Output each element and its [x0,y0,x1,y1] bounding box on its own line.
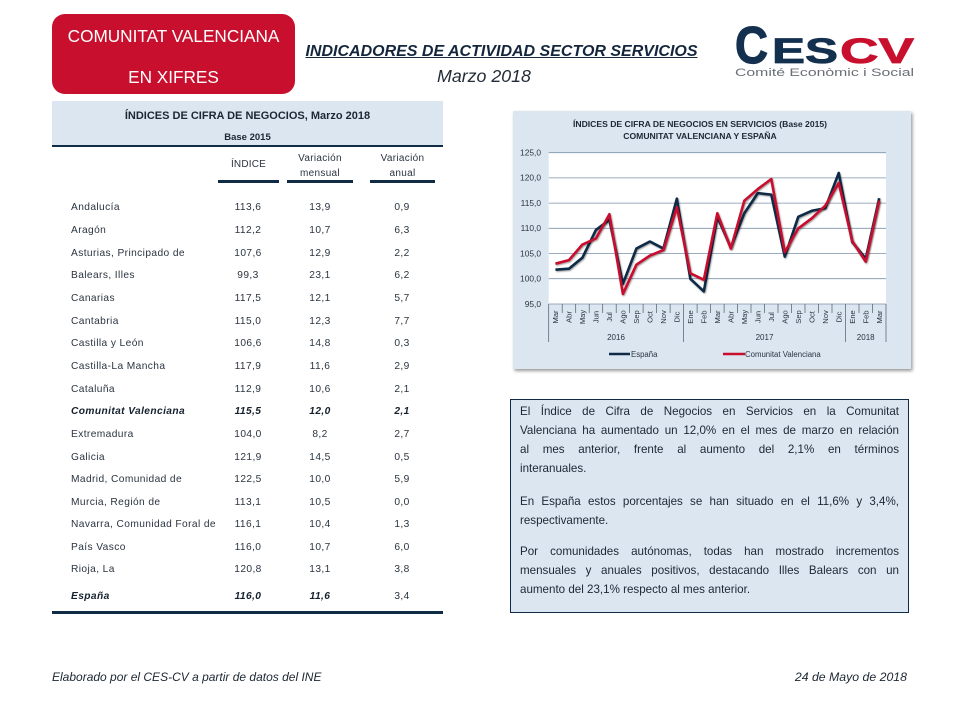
title: INDICADORES DE ACTIVIDAD SECTOR SERVICIOS [305,43,698,60]
row: Espana: 116,0 [235,591,261,602]
row: Asturias: Asturias, Principado de [71,248,185,259]
header badge: COMUNITAT VALENCIANA [68,26,279,46]
row: Cantabria: 115,0 [235,316,261,327]
row: Cantabria: Cantabria [71,316,119,327]
row: Extremadura: 8,2 [312,429,328,440]
x axis month labels: Feb [862,310,870,324]
column header: indice: ÍNDICE [231,159,266,170]
row: Asturias: 107,6 [234,248,262,259]
row: Espana: España [71,591,110,602]
x axis month labels: Sep [794,310,803,324]
row: Castilla-La Mancha: 11,6 [310,361,330,372]
row: Galicia [71,452,410,463]
row: Comunitat Valenciana: 2,1 [394,406,410,417]
x axis month labels: Nov [659,310,668,324]
logo: CES-CV [735,20,915,79]
row: Murcia [71,497,410,508]
row: Andalucia: 13,9 [309,202,331,213]
row: Cataluna: 10,6 [309,384,331,395]
x axis month labels: Ene [686,310,695,324]
column header: variacion anual: anual [390,168,415,179]
legend: España [631,350,658,359]
paragraph 1: al mes anterior, frente al aumento del 2,1% en términos [520,442,899,456]
row: Extremadura: 104,0 [234,429,262,440]
row: Rioja: 13,1 [309,564,331,575]
row: Castilla y Leon: 0,3 [394,338,410,349]
x axis month labels: Dic [834,311,844,322]
line chart panel [512,111,914,373]
chart title [573,119,827,141]
row: Aragon: Aragón [71,225,106,236]
x axis month labels: Ago [780,310,790,324]
row: Espana [71,591,410,602]
row: Galicia: Galicia [71,452,105,463]
footer date: 24 de Mayo de 2018 [795,670,907,684]
row: Comunitat Valenciana: Comunitat Valenciana [71,406,185,417]
column header: variacion mensual: Variación [298,153,342,164]
row: Andalucia [71,202,410,213]
row: Pais Vasco: 10,7 [309,542,331,553]
row: Canarias: 117,5 [235,293,261,304]
y axis labels: 105,0 [520,248,541,258]
row: Galicia: 0,5 [394,452,410,463]
table subtitle: Base 2015 [224,132,271,143]
row: Asturias: 12,9 [309,248,331,259]
row: Madrid: Madrid, Comunidad de [71,474,182,485]
row: Baleares: 6,2 [394,270,410,281]
row: Castilla y Leon: 14,8 [309,338,331,349]
row: Cataluna: 2,1 [394,384,410,395]
y axis labels: 120,0 [520,173,541,183]
x axis month labels: Nov [821,310,830,324]
row: Murcia: Murcia, Región de [71,497,160,508]
x axis year labels: 2018 [857,333,875,342]
x axis month labels: Feb [700,310,709,324]
table title: ÍNDICES DE CIFRA DE NEGOCIOS, Marzo 2018 [125,110,370,122]
row: Murcia: 113,1 [235,497,261,508]
row: Pais Vasco: 6,0 [394,542,410,553]
x axis month labels: Abr [727,311,736,323]
row: Castilla y Leon: Castilla y León [71,338,144,349]
row: Galicia: 121,9 [234,452,262,463]
logo: CES-CV: Comité Econòmic i Social [735,67,914,79]
series: Comunitat Valenciana [555,179,879,294]
row: Murcia: 10,5 [309,497,331,508]
header badge: EN XIFRES [128,67,219,87]
column header: indice [218,148,279,183]
row: Rioja: 3,8 [394,564,410,575]
subtitle: Marzo 2018 [437,66,531,86]
row: Cataluna: 112,9 [235,384,261,395]
row: Castilla y Leon: 106,6 [234,338,262,349]
row: Castilla-La Mancha [71,361,410,372]
paragraph 1 [520,404,899,474]
row: Extremadura: 2,7 [394,429,410,440]
row: Aragon: 10,7 [309,225,331,236]
row: Asturias: 2,2 [394,248,410,259]
x axis month labels: Ene [848,310,857,324]
paragraph 1: Valenciana ha aumentado un 12,0% en el mes de marzo en relación [520,424,899,436]
x axis month labels: Jun [592,311,601,323]
series: Espana [555,173,879,291]
row: Navarra [71,519,410,530]
paragraph 3: Por comunidades autónomas, todas han mostrado incrementos [520,545,899,558]
x axis month labels: Oct [646,310,655,323]
y axis labels: 115,0 [521,198,541,208]
row: Cantabria: 12,3 [309,316,331,327]
paragraph 1: interanuales. [520,462,586,474]
row: Aragon: 6,3 [394,225,410,236]
y axis labels: 100,0 [520,274,541,284]
y axis labels [520,148,541,309]
row: Canarias [71,293,410,304]
x axis month labels: Jul [767,312,776,322]
x axis year labels: 2017 [756,333,774,342]
row: Pais Vasco: 116,0 [235,542,261,553]
x axis month labels: Ago [619,310,628,324]
row: Extremadura: Extremadura [71,429,134,440]
x axis month labels: Sep [632,310,641,324]
x axis month labels: Jul [605,312,614,322]
logo: CES-CV: CV [840,32,915,71]
x axis month labels: Jun [754,311,762,323]
legend [609,350,821,359]
paragraph 2 [520,495,899,527]
row: Rioja [71,564,410,575]
row: Extremadura [71,429,410,440]
row: Comunitat Valenciana [71,406,410,417]
x axis month labels: Mar [551,310,560,324]
x axis month labels: Mar [713,310,722,324]
row: Castilla-La Mancha: 117,9 [235,361,261,372]
row: Canarias: 12,1 [309,293,331,304]
row: Baleares: 23,1 [309,270,331,281]
paragraph 2: respectivamente. [520,514,608,527]
table [52,101,443,614]
row: Baleares: 99,3 [237,270,259,281]
paragraph 3 [520,545,899,596]
row: Cataluna: Cataluña [71,384,115,395]
x axis month labels: Dic [673,311,682,322]
column header: variacion anual [370,148,435,183]
x axis month labels [551,310,884,324]
row: Navarra: Navarra, Comunidad Foral de [71,519,216,530]
row: Castilla y Leon [71,338,410,349]
row: Madrid [71,474,410,485]
row: Comunitat Valenciana: 12,0 [309,406,331,417]
paragraph 2: En España estos porcentajes se han situado en el 11,6% y 3,4%, [520,495,899,508]
row: Andalucia: 113,6 [235,202,261,213]
table bottom rule [52,611,443,614]
x axis month labels: May [740,310,749,324]
y axis labels: 125,0 [520,148,541,158]
row: Rioja: 120,8 [234,564,262,575]
x axis month labels: Abr [565,311,574,323]
row: Pais Vasco: País Vasco [71,542,126,553]
header badge [52,14,295,94]
row: Murcia: 0,0 [394,497,410,508]
row: Madrid: 5,9 [394,474,410,485]
row: Espana: 3,4 [394,591,410,602]
row: Rioja: Rioja, La [71,564,115,575]
row: Aragon [71,225,410,236]
chart title: ÍNDICES DE CIFRA DE NEGOCIOS EN SERVICIOS (Base 2015) [573,119,827,129]
row: Cantabria [71,316,410,327]
y axis labels: 95,0 [525,299,541,309]
column header: variacion mensual [287,148,353,183]
row: Baleares: Balears, Illes [71,270,135,281]
legend: Comunitat Valenciana [745,350,821,359]
x axis year labels [607,333,875,342]
row: Navarra: 116,1 [235,519,261,530]
row: Castilla-La Mancha: Castilla-La Mancha [71,361,165,372]
row: Espana: 11,6 [310,591,330,602]
row: Canarias: 5,7 [394,293,410,304]
paragraph 3: aumento del 23,1% respecto al mes anterior. [520,583,750,596]
row: Comunitat Valenciana: 115,5 [235,406,261,417]
row: Cantabria: 7,7 [394,316,410,327]
x axis month labels: Mar [875,310,884,324]
row: Navarra: 1,3 [394,519,410,530]
column header: variacion anual: Variación [381,153,424,164]
y axis labels: 110,0 [521,223,541,233]
footer source: Elaborado por el CES-CV a partir de datos del INE [52,670,321,684]
row: Asturias [71,248,410,259]
row: Pais Vasco [71,542,410,553]
logo: CES-CV: ES [772,32,838,71]
table header band [52,101,443,147]
row: Aragon: 112,2 [235,225,261,236]
row: Andalucia: Andalucía [71,202,120,213]
chart title: COMUNITAT VALENCIANA Y ESPAÑA [623,131,777,141]
x axis month labels: Oct [808,310,816,323]
row: Navarra: 10,4 [309,519,331,530]
row: Castilla-La Mancha: 2,9 [394,361,410,372]
row: Galicia: 14,5 [309,452,331,463]
column header: variacion mensual: mensual [300,168,340,179]
row: Andalucia: 0,9 [394,202,410,213]
row: Canarias: Canarias [71,293,115,304]
row: Baleares [71,270,410,281]
x axis month labels: May [578,310,587,324]
row: Madrid: 10,0 [309,474,331,485]
paragraph 1: El Índice de Cifra de Negocios en Servicios en la Comunitat [520,404,899,418]
commentary text box [510,399,909,613]
paragraph 3: mensuales y anuales positivos, destacando Illes Balears con un [520,564,899,577]
row: Cataluna [71,384,410,395]
x axis year labels: 2016 [607,333,625,342]
row: Madrid: 122,5 [234,474,262,485]
